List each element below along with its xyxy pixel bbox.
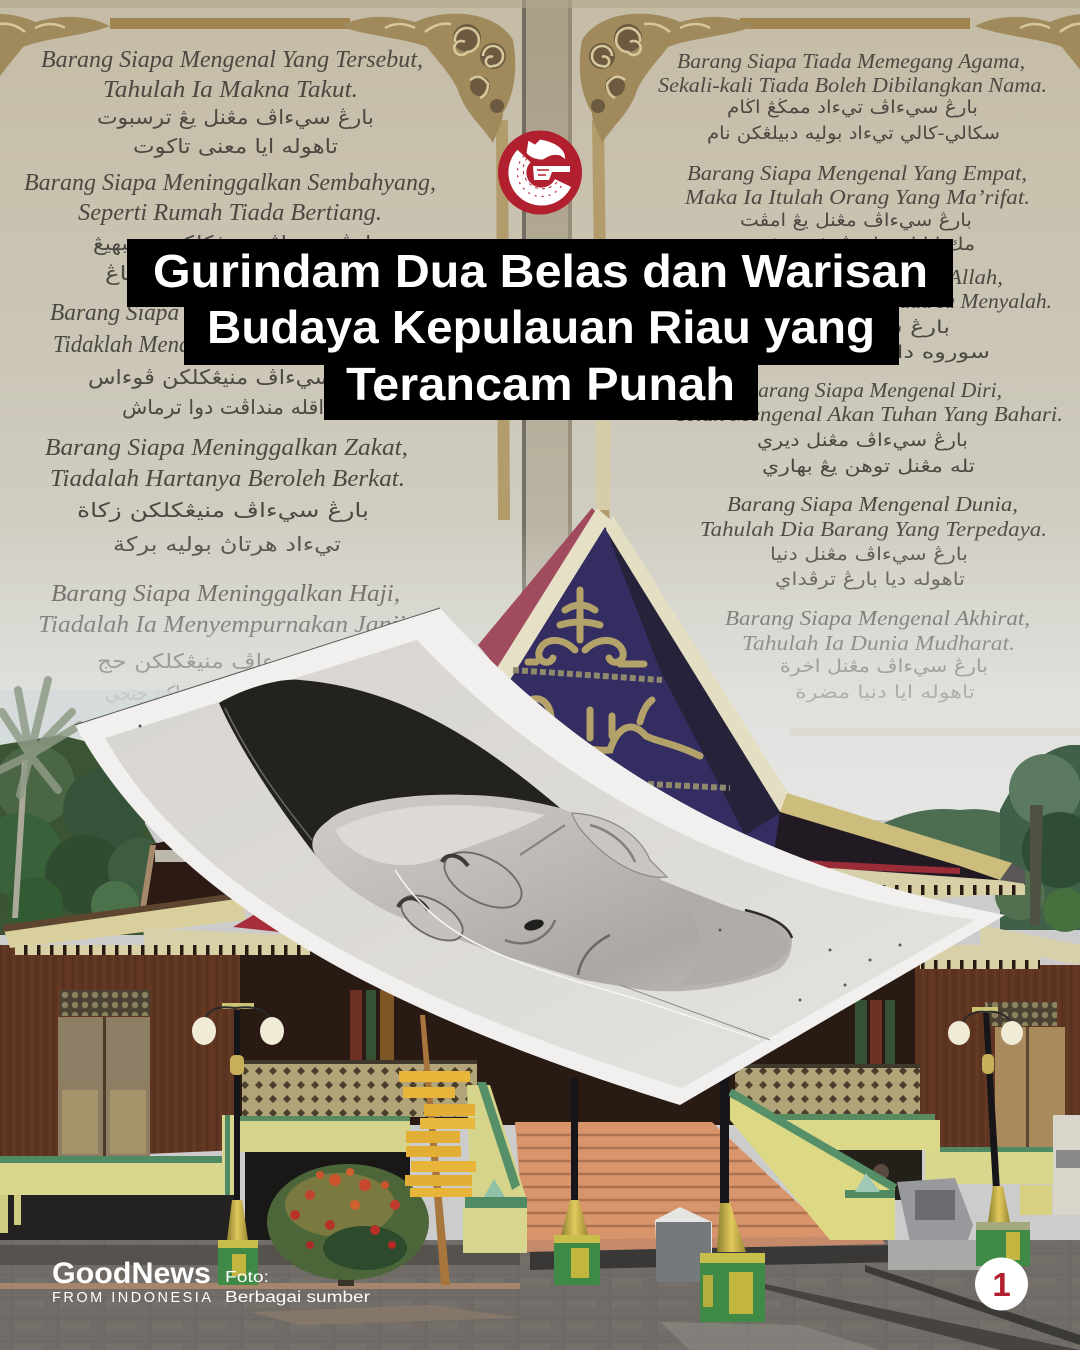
text block: right manuscript page: Barang Siapa Mengenal Diri, — [745, 378, 1002, 402]
doors and lattice windows — [58, 990, 1065, 1159]
lamp post: stair right — [700, 1075, 765, 1322]
text block: right manuscript page: Tahulah Dia Barang Yang Terpedaya. — [700, 517, 1047, 541]
text block: left manuscript page: بارڠ سيءاڤ منيڠكلكن حج — [97, 649, 359, 674]
text block: left manuscript page: Tidaklah Mendapat Dua Termasyhur. — [53, 332, 393, 358]
text block: right manuscript page: بارڠ سيءاڤ مڠنل يڠ امڤت — [740, 210, 972, 231]
text block: right manuscript page: Barang Siapa Mengenal Dunia, — [727, 492, 1018, 516]
text block: left manuscript page: Seperti Rumah Tiada Bertiang. — [78, 200, 382, 226]
title: black highlighted heading: Gurindam Dua Belas dan Warisan — [153, 245, 928, 297]
stairs — [515, 1122, 885, 1252]
text block: left manuscript page — [24, 47, 436, 706]
lamp post: stair left — [554, 1078, 600, 1285]
frame: gold borders and corner ornaments — [0, 14, 1080, 560]
portrait: black songkok hat — [219, 680, 560, 857]
text block: left manuscript page: بارڠ سيءاڤ مڠنل يڠ ترسبوت — [97, 105, 374, 130]
building: walls and interior — [0, 945, 1080, 1160]
page number badge: 1 — [992, 1266, 1011, 1303]
text block: right manuscript page — [658, 49, 1063, 703]
text block: left manuscript page: تاهوله ايا معنى تاكوت — [133, 134, 338, 158]
background: manuscript panels — [0, 0, 1080, 800]
text block: right manuscript page: بارڠ سيءاڤ مڠنل اخرة — [780, 656, 988, 677]
text block: left manuscript page: تيداقله منداڤت دوا ترماش — [122, 395, 347, 419]
text block: right manuscript page: بارڠ سيءاڤ مڠنل ديري — [757, 430, 968, 451]
text block: right manuscript page: Barang Siapa Mengenal Allah, — [720, 265, 1003, 289]
photo print area — [105, 640, 975, 1088]
text block: right manuscript page: تله مڠنل توهن يڠ بهاري — [762, 456, 975, 477]
signpost with yellow planks — [399, 1015, 476, 1285]
text block: right manuscript page: سكالي-كالي تيءاد بوليه دبيلڠكن نام — [707, 123, 1000, 144]
title: black highlighted heading: Terancam Punah — [346, 358, 735, 410]
text block: left manuscript page: Tiadalah Ia Menyempurnakan Janji. — [38, 612, 412, 638]
brand: GoodNews from Indonesia: GoodNews — [52, 1257, 211, 1290]
text block: left manuscript page: تيءاد ايا مڽمڤورناكن جنجي — [105, 681, 305, 706]
lamp post: left — [192, 1003, 284, 1285]
text block: left manuscript page: Barang Siapa Meninggalkan Haji, — [51, 581, 400, 607]
text block: left manuscript page: Tiadalah Hartanya Beroleh Berkat. — [50, 466, 405, 492]
logo: GNFI red emblem — [498, 130, 582, 214]
photo credit — [225, 1269, 370, 1306]
text block: right manuscript page: Suruh dan Tegahnya Tiada Ia Menyalah. — [700, 289, 1052, 313]
lamp post: right — [948, 1007, 1030, 1266]
text block: right manuscript page: Maka Ia Itulah Orang Yang Ma’rifat. — [684, 185, 1030, 209]
text block: right manuscript page: بارڠ سيءاڤ مڠنل دنيا — [770, 544, 968, 565]
text block: left manuscript page: بارڠ سيءاڤ منيڠكلكن ڤوءاس — [88, 365, 378, 390]
ground: paving — [0, 1240, 1080, 1350]
text block: right manuscript page: بارڠ سيءاڤ مڠنل الله — [720, 317, 950, 338]
photo credit: Berbagai sumber — [225, 1289, 370, 1306]
shrub — [267, 1164, 429, 1286]
text block: left manuscript page: Tahulah Ia Makna Takut. — [103, 77, 358, 103]
gable ornament — [528, 590, 700, 756]
text block: right manuscript page: Telah Mengenal Akan Tuhan Yang Bahari. — [675, 402, 1063, 426]
text block: right manuscript page: تاهوله ايا دنيا مضرة — [795, 682, 975, 703]
text block: right manuscript page: Barang Siapa Mengenal Yang Empat, — [687, 161, 1027, 185]
text block: left manuscript page: Barang Siapa Meninggalkan Puasa, — [50, 300, 390, 326]
building: central roof gable — [478, 420, 840, 900]
text block: right manuscript page: Barang Siapa Mengenal Akhirat, — [725, 606, 1030, 630]
photo credit: Foto: — [225, 1269, 269, 1286]
specks — [138, 724, 902, 1002]
page number badge — [975, 1258, 1028, 1310]
text block: left manuscript page: بارڠ سيءاڤ منيڠكلكن سمبهيڠ — [93, 231, 378, 256]
text block: left manuscript page: بارڠ سيءاڤ منيڠكلكن زكاة — [77, 498, 369, 523]
trees behind the building — [0, 680, 1080, 935]
portrait: face — [312, 795, 792, 1040]
brand: GoodNews from Indonesia: FROM INDONESIA — [52, 1290, 211, 1306]
balustrades and yellow base walls — [0, 1060, 1055, 1245]
text block: right manuscript page: تاهوله ديا بارڠ ترڤداي — [775, 569, 965, 590]
text block: right manuscript page: بارڠ سيءاڤ تيءاد ممڬڠ اڬام — [727, 97, 978, 118]
text block: left manuscript page: Barang Siapa Mengenal Yang Tersebut, — [41, 47, 423, 73]
text block: left manuscript page: تيءاد هرتاڽ بوليه بركة — [113, 532, 341, 557]
text block: right manuscript page: مك ايا ايت اورڠ يڠ معرفت — [750, 234, 975, 255]
text block: right manuscript page: Tahulah Ia Dunia Mudharat. — [742, 631, 1015, 655]
stair railings — [463, 1082, 895, 1253]
photo paper — [75, 608, 1005, 1105]
stone signs — [655, 1115, 1080, 1282]
title: black highlighted heading — [127, 239, 953, 420]
text block: left manuscript page: Barang Siapa Meninggalkan Sembahyang, — [24, 170, 436, 196]
text block: left manuscript page: سڤرتي رومه تيءاد برتياڠ — [105, 261, 365, 286]
building: right roof — [770, 793, 1080, 969]
title: black highlighted heading: Budaya Kepulauan Riau yang — [207, 301, 875, 353]
curled photo: portrait of Raja Ali Haji — [75, 608, 1005, 1105]
text block: right manuscript page: Barang Siapa Tiada Memegang Agama, — [677, 49, 1025, 73]
text block: right manuscript page: Sekali-kali Tiada Boleh Dibilangkan Nama. — [658, 73, 1047, 97]
text block: right manuscript page: سوروه دان لارڠن ايا مڽاله — [730, 342, 990, 363]
brand: GoodNews from Indonesia — [52, 1257, 211, 1306]
text block: left manuscript page: Barang Siapa Meninggalkan Zakat, — [45, 435, 408, 461]
building: left roof — [3, 838, 310, 955]
